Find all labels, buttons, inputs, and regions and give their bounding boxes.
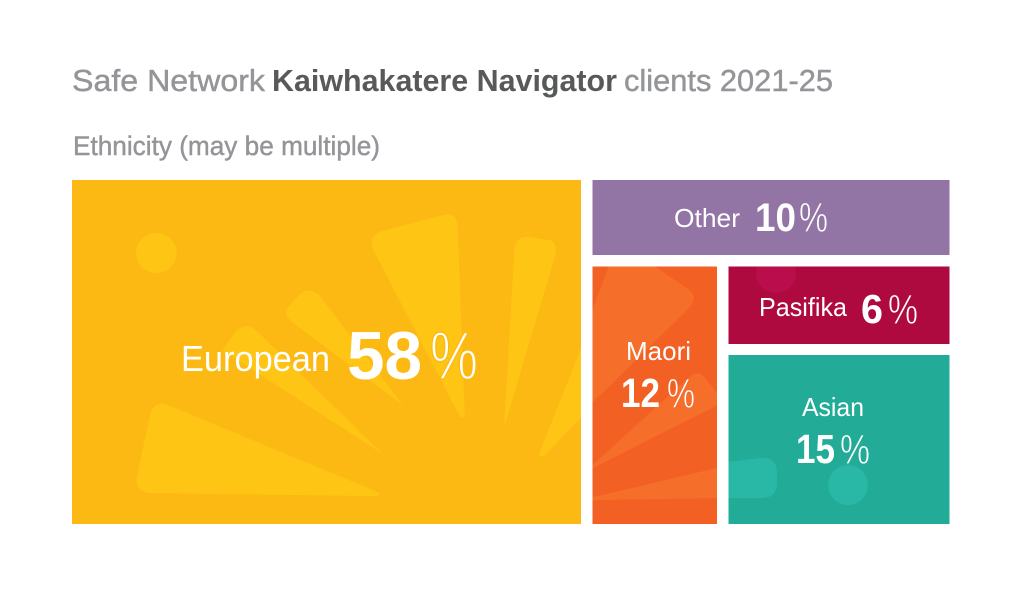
label: Other: Other bbox=[674, 203, 740, 233]
decorative shapes: Asian bbox=[720, 458, 868, 505]
panel: European 58% bbox=[72, 180, 592, 524]
value: 6% bbox=[861, 286, 918, 333]
value: 58%: % bbox=[430, 318, 478, 394]
decorative sunburst shapes: Maori bbox=[592, 266, 717, 500]
label: Asian: Asian bbox=[802, 392, 864, 422]
panel: Other 10% bbox=[592, 180, 950, 255]
value: 6%: % bbox=[888, 286, 918, 333]
value: 10%: 10 bbox=[755, 196, 796, 240]
value: 12%: 12 bbox=[621, 370, 660, 416]
panel: Asian 15% bbox=[720, 355, 950, 524]
decorative sunburst shapes: European bbox=[136, 214, 592, 496]
subtitle: Ethnicity (may be multiple) bbox=[73, 131, 380, 161]
label: Maori: Maori bbox=[626, 336, 691, 366]
label: Pasifika: Pasifika bbox=[759, 292, 848, 322]
value: 58%: 58 bbox=[347, 318, 422, 394]
value: 15%: % bbox=[840, 426, 870, 473]
value: 12%: % bbox=[667, 370, 695, 417]
value: 10%: % bbox=[799, 194, 828, 241]
value: 12% bbox=[621, 370, 695, 417]
panel: Maori 12% bbox=[592, 266, 717, 524]
title: Kaiwhakatere Navigator bbox=[272, 63, 617, 98]
value: 6%: 6 bbox=[861, 286, 883, 332]
panel: Pasifika 6% bbox=[728, 266, 950, 344]
title: clients 2021-25 bbox=[624, 63, 833, 98]
title bbox=[72, 63, 833, 98]
value: 58% bbox=[347, 318, 478, 394]
value: 15% bbox=[796, 426, 870, 473]
value: 10% bbox=[755, 194, 828, 241]
title: Safe Network bbox=[72, 63, 266, 98]
label: European: European bbox=[181, 338, 330, 379]
value: 15%: 15 bbox=[796, 426, 835, 472]
decorative circle: Pasifika bbox=[756, 266, 796, 293]
